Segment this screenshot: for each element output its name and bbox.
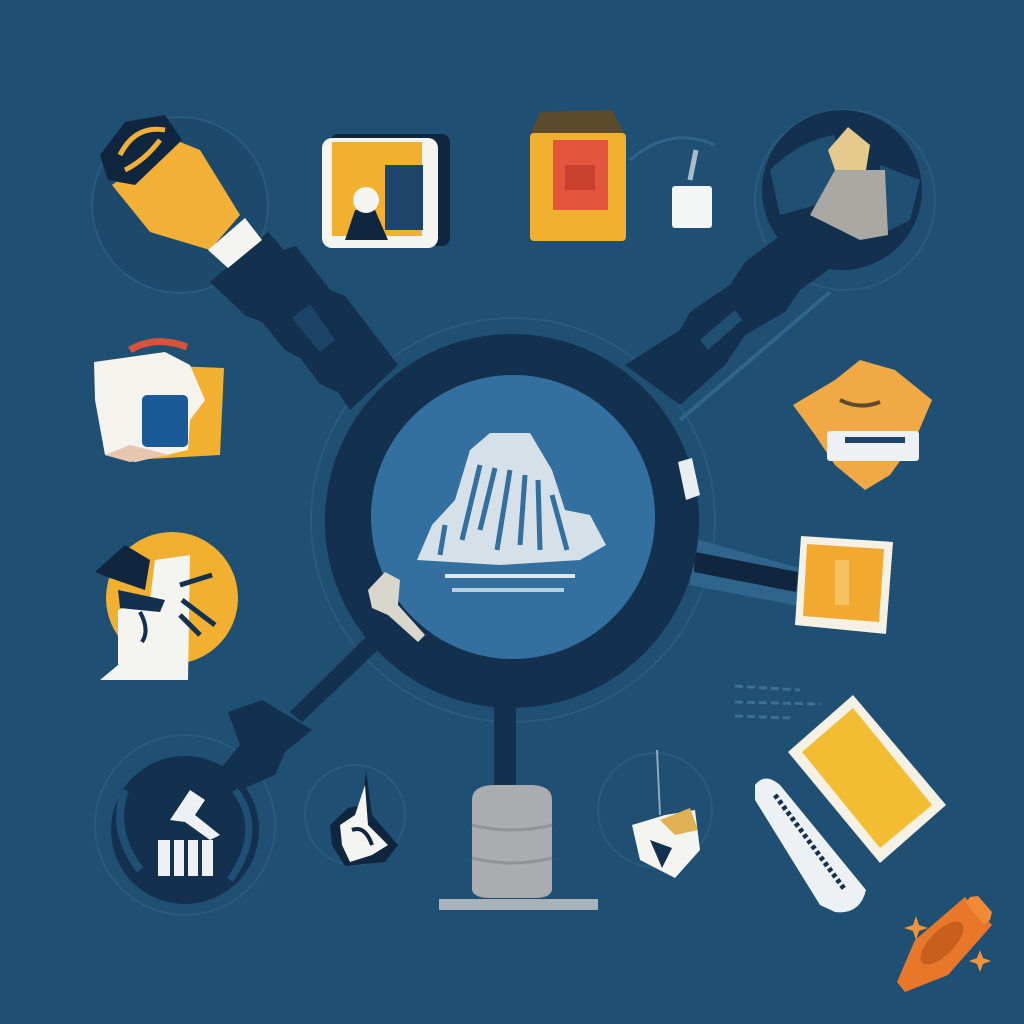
logo: orange crayon bbox=[897, 896, 992, 992]
icon: yellow bag with white cloth, left bbox=[94, 342, 224, 462]
hub icon: white figure bbox=[417, 433, 606, 592]
icon: white hand, bottom bbox=[330, 770, 398, 866]
icon: torn paper, bottom right bbox=[632, 750, 700, 878]
spoke: bottom bbox=[494, 695, 516, 790]
icon: yellow box with red panel, top bbox=[530, 110, 626, 241]
hub inner disc bbox=[371, 375, 655, 659]
icon: photo card, top bbox=[322, 134, 450, 248]
spoke: right bbox=[690, 538, 800, 606]
icon: orange head with visor, right bbox=[793, 360, 932, 490]
icon: water bottle on stand, bottom bbox=[439, 785, 598, 910]
spoke: upper right bbox=[625, 228, 835, 420]
icon: dark circular scene, lower left bbox=[111, 756, 259, 904]
icon: white marker, lower right bbox=[755, 778, 866, 912]
small legend lines, lower right bbox=[735, 686, 820, 718]
central hub bbox=[325, 334, 699, 708]
hub accent: white bar on right of ring bbox=[678, 458, 700, 500]
icon: yellow moon and white figure, left bbox=[95, 532, 238, 680]
icon: small white cup, top bbox=[630, 138, 715, 228]
hub accent: white mark on lower left of ring bbox=[368, 572, 425, 642]
faint halo rings bbox=[92, 110, 935, 915]
icon: orange note, right bbox=[795, 536, 893, 634]
icon: yellow card, lower right bbox=[788, 695, 946, 863]
spoke: lower left bbox=[215, 635, 380, 790]
icon: yellow fist, upper left bbox=[100, 115, 262, 268]
spoke: upper left bbox=[210, 232, 398, 410]
hub dark ring bbox=[325, 334, 699, 708]
icon: circular scene, upper right bbox=[762, 110, 922, 270]
